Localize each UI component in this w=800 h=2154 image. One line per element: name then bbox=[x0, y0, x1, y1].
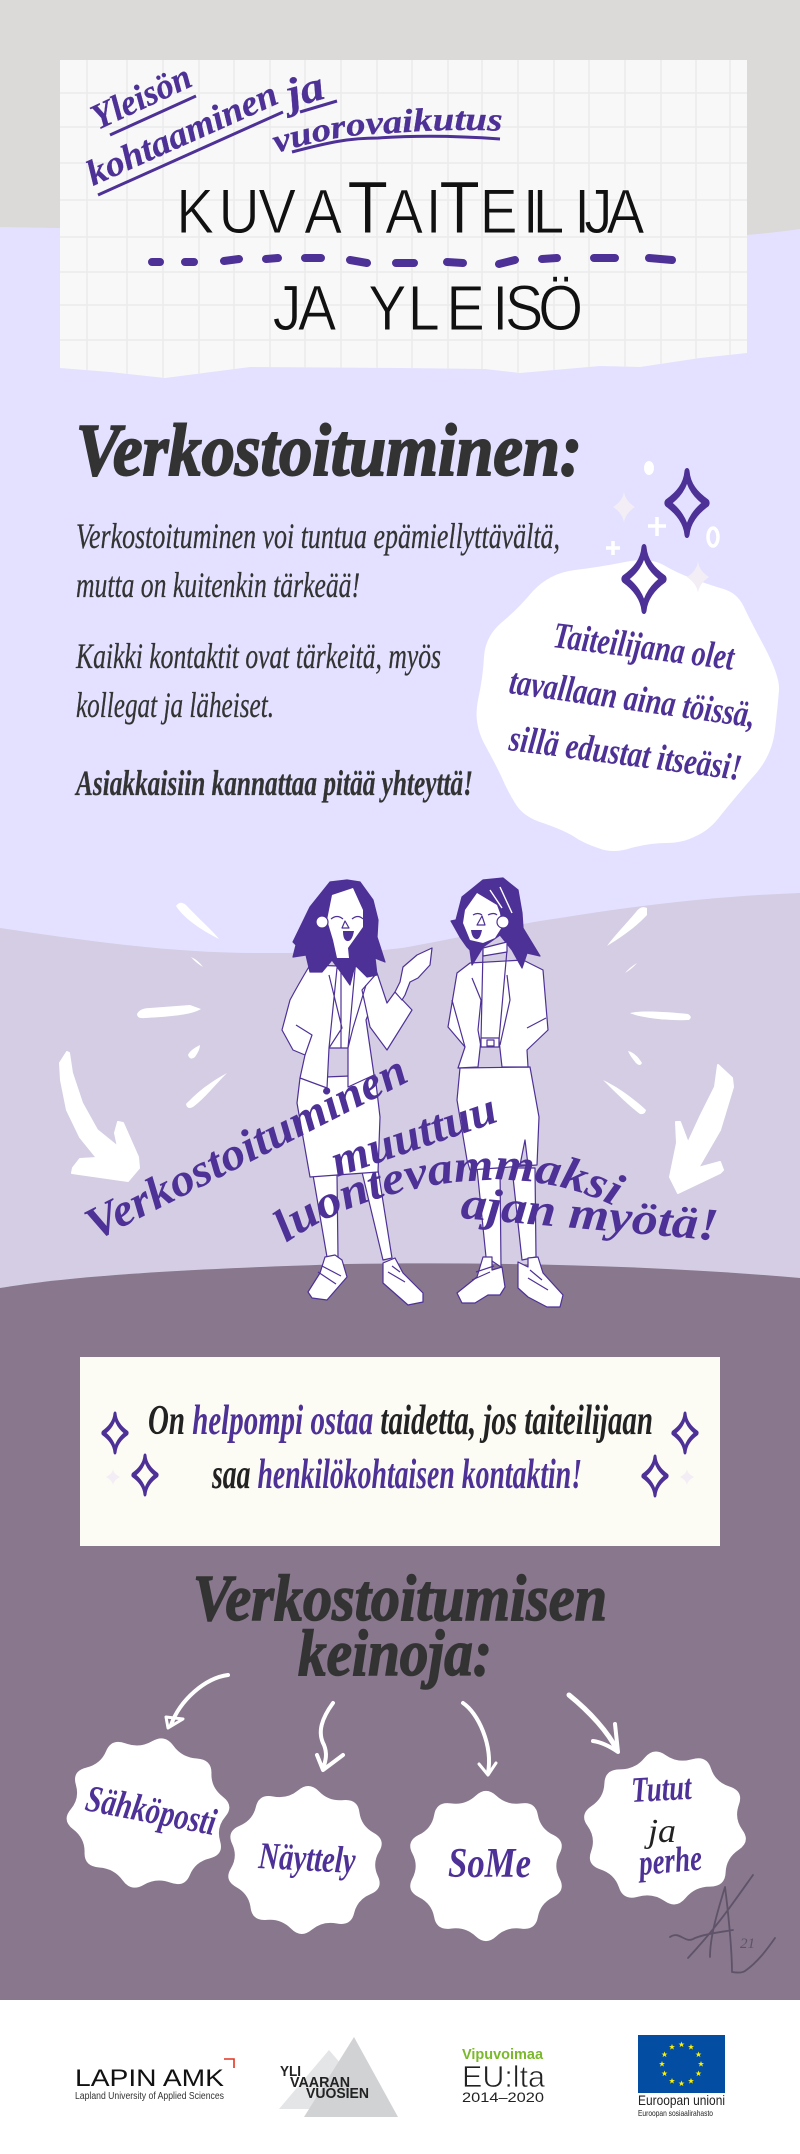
background: grey top band bbox=[0, 0, 800, 260]
subtitle: Yleisön kohtaaminen ja vuorovaikutus: vuorovaikutus bbox=[272, 108, 502, 152]
icons: faint sparkles bbox=[106, 1469, 694, 1485]
heading: Verkostoituminen: Verkostoituminen: bbox=[76, 410, 582, 492]
logo: Lapin AMK: LAPIN AMK bbox=[75, 2065, 224, 2092]
blob: Sähköposti bbox=[55, 1722, 241, 1904]
icons: sparkles above callout bbox=[606, 461, 718, 610]
arrow: big white left bbox=[60, 1052, 139, 1181]
logo: Vipuvoimaa EU:lta: 2014–2020 bbox=[462, 2089, 544, 2105]
subtitle: Yleisön kohtaaminen ja vuorovaikutus: Yleisön bbox=[84, 56, 197, 137]
arrow: big white right bbox=[670, 1065, 733, 1193]
background: dark purple wave bbox=[0, 1263, 800, 2000]
hair bbox=[293, 880, 385, 985]
blob: Näyttely bbox=[225, 1782, 385, 1938]
icons: white burst rays bbox=[137, 903, 691, 1114]
blob: Tutut ja perhe: Tutut bbox=[630, 1767, 693, 1810]
heading: Verkostoitumisen keinoja: Verkostoitumisen bbox=[193, 1562, 607, 1635]
logo: Vipuvoimaa EU:lta: Vipuvoimaa bbox=[462, 2046, 544, 2063]
blob: Tutut ja perhe: perhe bbox=[635, 1838, 703, 1883]
icons: purple sparkles bbox=[103, 1414, 697, 1495]
logo: Yli vaaran vuosien: VAARAN bbox=[290, 2075, 350, 2091]
blob: Näyttely: Näyttely bbox=[257, 1835, 357, 1882]
panel: torn grid paper title card bbox=[60, 56, 747, 378]
divider: hand drawn purple dashes bbox=[152, 258, 672, 264]
logo: Vipuvoimaa EU:lta: EU:lta bbox=[462, 2059, 546, 2094]
logo: European Union flag: Euroopan unioni bbox=[638, 2092, 725, 2108]
illustration: woman with ponytail bbox=[448, 878, 563, 1307]
callout: Verkostoituminen muuttuu luontevammaksi ajan myötä: Verkostoituminen bbox=[76, 1044, 415, 1250]
callout: Verkostoituminen muuttuu luontevammaksi ajan myötä: luontevammaksi bbox=[272, 1156, 626, 1242]
panel: cream paper quote box bbox=[80, 1357, 720, 1546]
background: light purple wave bbox=[0, 893, 800, 2154]
callout: Verkostoituminen muuttuu luontevammaksi ajan myötä: muuttuu bbox=[324, 1082, 503, 1186]
logo: European Union flag bbox=[638, 2035, 725, 2118]
heading: KUVATAITEILIJA: KUVATAITEILIJA bbox=[176, 166, 644, 249]
text block: networking intro bbox=[75, 516, 560, 803]
callout text: Taiteilijana olet bbox=[551, 615, 738, 679]
logo: Yli vaaran vuosien: VUOSIEN bbox=[306, 2086, 369, 2102]
quote text: On helpompi ostaa taidetta, jos taiteilijaan bbox=[148, 1398, 653, 1444]
text block: networking intro: Verkostoituminen voi tuntua epämiellyttävältä, bbox=[76, 516, 560, 556]
blob: Tutut ja perhe bbox=[576, 1741, 754, 1915]
face bbox=[463, 893, 502, 943]
heading: JA YLEISÖ: JA YLEISÖ bbox=[273, 272, 583, 344]
blob: SoMe: SoMe bbox=[448, 1841, 531, 1887]
panel: method blobs bbox=[55, 1722, 754, 1941]
panel: white wavy callout bbox=[477, 560, 779, 851]
signature: 21 bbox=[740, 1936, 755, 1952]
logo: Lapin AMK bbox=[75, 2059, 234, 2102]
logo: Vipuvoimaa EU:lta bbox=[462, 2046, 546, 2105]
logo: Lapin AMK: Lapland University of Applied Sciences bbox=[75, 2091, 224, 2102]
subtitle: Yleisön kohtaaminen ja vuorovaikutus: kohtaaminen bbox=[80, 73, 284, 193]
heading: Verkostoitumisen keinoja: keinoja: bbox=[298, 1617, 492, 1690]
quote text bbox=[148, 1398, 653, 1498]
face bbox=[327, 888, 363, 958]
hair bbox=[451, 878, 540, 968]
callout text bbox=[506, 615, 758, 789]
signature bbox=[670, 1875, 775, 1973]
background: white footer bbox=[0, 2000, 800, 2154]
blob: Sähköposti: Sähköposti bbox=[82, 1778, 220, 1844]
logo: Yli vaaran vuosien: YLI bbox=[280, 2064, 301, 2080]
callout: Verkostoituminen muuttuu luontevammaksi ajan myötä: ajan myötä! bbox=[459, 1177, 721, 1250]
neck bbox=[483, 942, 507, 956]
subtitle: Yleisön kohtaaminen ja vuorovaikutus: ja bbox=[275, 63, 329, 119]
arrows: thin white curved bbox=[166, 1675, 618, 1775]
illustration: woman with open hair bbox=[282, 880, 432, 1305]
heading: Verkostoitumisen keinoja bbox=[193, 1562, 607, 1690]
text block: networking intro: Asiakkaisiin kannattaa pitää yhteyttä! bbox=[75, 763, 473, 803]
text block: networking intro: kollegat ja läheiset. bbox=[76, 685, 274, 725]
blob: Tutut ja perhe: ja bbox=[644, 1813, 676, 1850]
callout: Verkostoituminen muuttuu luontevammaksi ajan myötä bbox=[76, 1044, 721, 1250]
logo: Yli vaaran vuosien bbox=[279, 2037, 398, 2117]
subtitle: Yleisön kohtaaminen ja vuorovaikutus bbox=[80, 56, 502, 196]
logo: European Union flag: Euroopan sosiaalirahasto bbox=[638, 2108, 713, 2118]
blob: SoMe bbox=[410, 1791, 562, 1941]
text block: networking intro: Kaikki kontaktit ovat tärkeitä, myös bbox=[75, 636, 441, 676]
text block: networking intro: mutta on kuitenkin tärkeää! bbox=[76, 565, 360, 605]
quote text: saa henkilökohtaisen kontaktin! bbox=[211, 1452, 582, 1498]
